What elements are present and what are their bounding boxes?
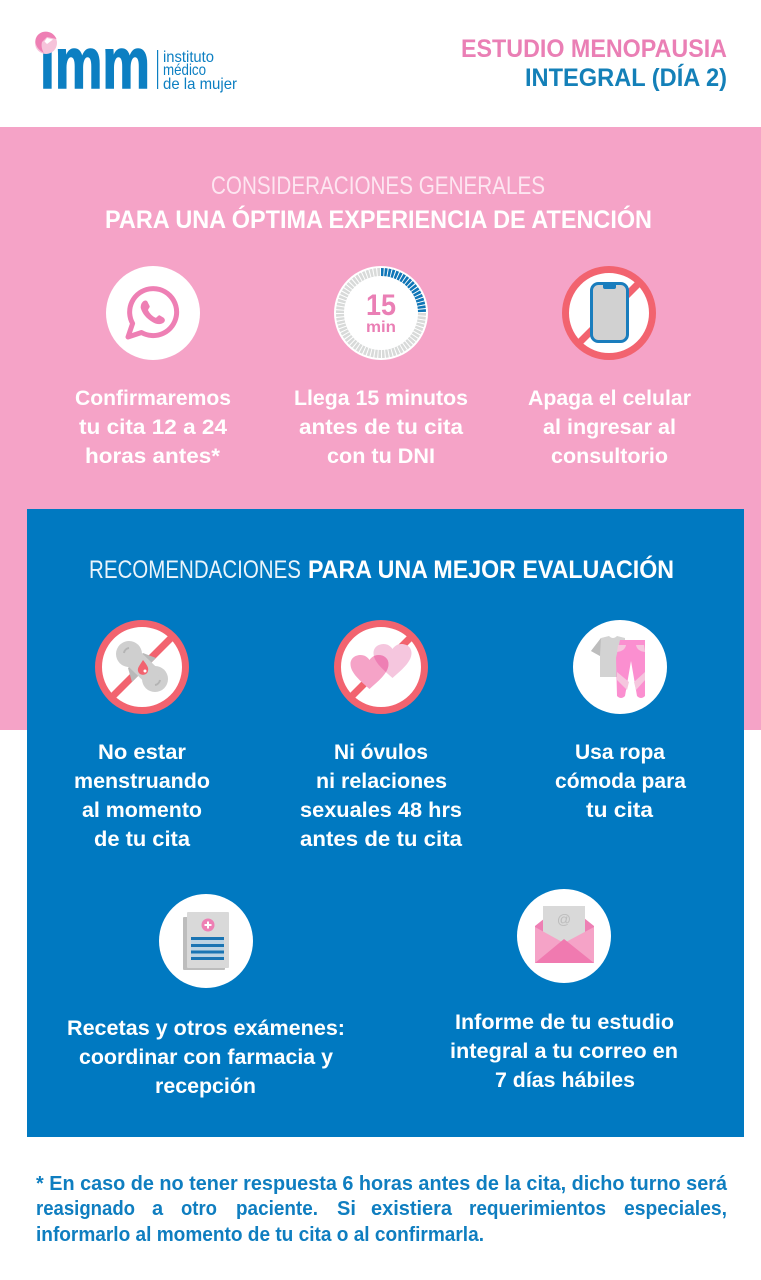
text: arrive early: antes de tu cita — [299, 415, 464, 439]
footnote: * En caso de no tener respuesta 6 horas antes de la cita, dicho turno será — [36, 1173, 728, 1195]
text: confirm appointment — [75, 386, 231, 468]
footnote: otro — [181, 1198, 217, 1220]
footnote: reasignado — [36, 1198, 135, 1220]
text: confirm appointment: horas antes* — [85, 444, 221, 468]
icon: 15 minute clock — [334, 266, 428, 360]
icon: no menstruation — [98, 624, 186, 710]
icon: email report: @ — [557, 911, 571, 927]
logo: imm: médico — [163, 62, 206, 79]
footnote: especiales, — [624, 1198, 727, 1220]
text: arrive early: con tu DNI — [327, 444, 435, 468]
text: report by email: integral a tu correo en — [450, 1039, 678, 1063]
text: no menstruating: No estar — [98, 740, 187, 764]
text: report by email: Informe de tu estudio — [455, 1010, 674, 1034]
footnote: Si — [337, 1198, 356, 1220]
heading: general considerations: PARA UNA ÓPTIMA EXPERIENCIA DE ATENCIÓN — [105, 204, 652, 234]
text: comfortable clothes — [555, 740, 687, 822]
footnote: a — [152, 1198, 164, 1220]
icon: no phone — [566, 270, 652, 356]
text: phone off: consultorio — [551, 444, 668, 468]
text: prescriptions: recepción — [155, 1074, 256, 1098]
text: confirm appointment: Confirmaremos — [75, 386, 231, 410]
text: no ovules or sex: sexuales 48 hrs — [300, 798, 462, 822]
heading: general considerations — [105, 172, 652, 234]
heading: recommendations: PARA UNA MEJOR EVALUACIÓN — [308, 554, 674, 584]
icon: 15 minute clock: 15 — [366, 289, 396, 322]
title: study name: INTEGRAL (DÍA 2) — [525, 63, 727, 92]
logo: imm: instituto — [163, 49, 214, 66]
text: comfortable clothes: Usa ropa — [575, 740, 666, 764]
text: no menstruating: al momento — [82, 798, 202, 822]
icon: ribbon — [35, 32, 57, 54]
footnote: existiera — [371, 1198, 453, 1220]
text: arrive early — [294, 386, 468, 468]
text: prescriptions: Recetas y otros exámenes: — [67, 1016, 345, 1040]
text: comfortable clothes: tu cita — [586, 798, 654, 822]
heading: general considerations: CONSIDERACIONES GENERALES — [211, 172, 545, 200]
text: no menstruating — [74, 740, 210, 851]
title: study name: ESTUDIO MENOPAUSIA — [461, 35, 727, 63]
text: comfortable clothes: cómoda para — [555, 769, 687, 793]
icon: prescriptions — [159, 894, 253, 988]
icon: whatsapp — [106, 266, 200, 360]
icon: comfortable clothes — [573, 620, 667, 714]
text: no ovules or sex: ni relaciones — [316, 769, 447, 793]
icon: 15 minute clock: min — [366, 319, 396, 336]
footnote: requerimientos — [469, 1198, 606, 1220]
text: no ovules or sex: Ni óvulos — [334, 740, 428, 764]
text: report by email: 7 días hábiles — [495, 1068, 635, 1092]
text: phone off: al ingresar al — [543, 415, 676, 439]
text: no menstruating: de tu cita — [94, 827, 191, 851]
panel: blue recommendations — [27, 509, 744, 1137]
footnote: paciente. — [236, 1198, 318, 1220]
text: phone off: Apaga el celular — [528, 386, 692, 410]
heading: recommendations: RECOMENDACIONES — [89, 556, 301, 584]
text: no menstruating: menstruando — [74, 769, 210, 793]
title: study name — [461, 35, 727, 92]
text: phone off — [528, 386, 692, 468]
icon: email report — [517, 889, 611, 983]
footnote: informarlo al momento de tu cita o al confirmarla. — [36, 1224, 484, 1246]
footnote — [36, 1173, 728, 1246]
logo: imm: imm — [40, 24, 150, 104]
text: prescriptions: coordinar con farmacia y — [79, 1045, 333, 1069]
text: no ovules or sex — [300, 740, 463, 851]
icon: no sex — [338, 624, 424, 710]
text: prescriptions — [67, 1016, 345, 1098]
heading: recommendations — [89, 554, 674, 584]
text: report by email — [450, 1010, 678, 1092]
logo: imm: de la mujer — [163, 76, 238, 93]
text: confirm appointment: tu cita 12 a 24 — [79, 415, 227, 439]
text: no ovules or sex: antes de tu cita — [300, 827, 463, 851]
text: arrive early: Llega 15 minutos — [294, 386, 468, 410]
panel: pink background — [0, 127, 761, 730]
